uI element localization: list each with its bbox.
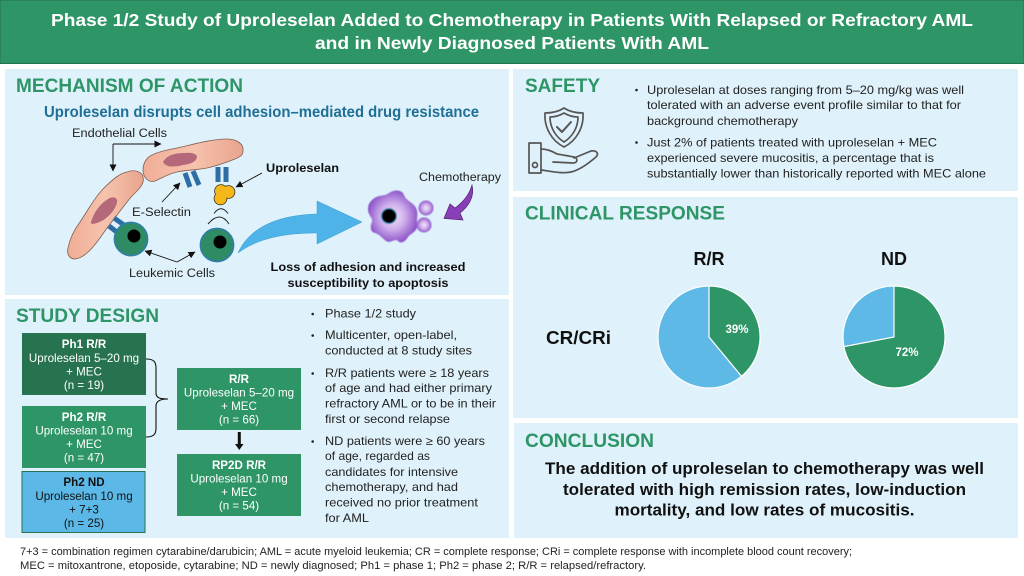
- box: Ph2 R/R: + MEC: [66, 438, 102, 451]
- heading: study design: STUDY DESIGN: [16, 306, 159, 327]
- heading: mechanism of action: MECHANISM OF ACTION: [16, 76, 243, 97]
- label: e-selectin: [132, 183, 191, 219]
- text block: study bullets: ND patients were ≥ 60 years: [325, 435, 485, 448]
- box: Ph1 R/R: + MEC: [66, 366, 102, 378]
- illustration: e-selectin receptors: [109, 167, 226, 233]
- subheading: Uproleselan disrupts cell adhesion–mediated drug resistance: [44, 104, 479, 121]
- text block: study bullets: received no prior treatment: [325, 496, 479, 510]
- icon: shield and hand: [529, 108, 597, 173]
- heading: safety: SAFETY: [525, 76, 600, 97]
- illustration: uproleselan molecule: [208, 185, 234, 224]
- label: e-selectin: E-Selectin: [132, 207, 191, 219]
- row label: CR/CRi: CR/CRi: [546, 328, 611, 348]
- text block: safety bullets: substantially lower than historically reported with MEC alone: [647, 166, 986, 180]
- box: Ph2 R/R: [22, 406, 146, 468]
- box: Ph1 R/R: [22, 333, 146, 395]
- title banner: and in Newly Diagnosed Patients With AML: [315, 33, 709, 53]
- column label: ND: ND: [881, 249, 907, 269]
- text block: conclusion: mortality, and low rates of mucositis.: [614, 502, 914, 520]
- bracket: [146, 359, 168, 437]
- box: R/R combined: [177, 368, 301, 430]
- title banner: Phase 1/2 Study of Uproleselan Added to Chemotherapy in Patients With Relapsed or Refractory AML: [51, 10, 973, 30]
- label: endothelial cells: Endothelial Cells: [72, 128, 167, 140]
- caption: loss of adhesion: Loss of adhesion and increased: [270, 260, 466, 274]
- panel: conclusion: [514, 423, 1018, 538]
- footnote: [20, 546, 852, 572]
- heading: conclusion: CONCLUSION: [525, 431, 654, 452]
- box: RP2D R/R: + MEC: [221, 486, 257, 499]
- arrow: chemotherapy: [444, 185, 473, 220]
- illustration: endothelial cells: [68, 139, 243, 259]
- box: R/R combined: R/R: [229, 373, 250, 386]
- box: RP2D R/R: [177, 454, 301, 516]
- arrow: R/R to RP2D: [235, 432, 244, 450]
- caption: loss of adhesion: susceptibility to apoptosis: [288, 276, 449, 290]
- text block: study bullets: of age, regarded as: [325, 450, 430, 463]
- panel: safety: [513, 69, 1018, 191]
- box: Ph1 R/R: (n = 19): [64, 379, 104, 392]
- text block: safety bullets: Just 2% of patients treated with uproleselan + MEC: [647, 136, 937, 150]
- caption: loss of adhesion: [270, 260, 466, 290]
- box: Ph2 R/R: (n = 47): [64, 452, 104, 464]
- box: Ph2 ND: [22, 472, 145, 532]
- box: RP2D R/R: (n = 54): [219, 500, 259, 512]
- box: R/R combined: Uproleselan 5–20 mg: [184, 386, 294, 400]
- text block: conclusion: The addition of uproleselan to chemotherapy was well: [545, 460, 984, 478]
- box: Ph2 R/R: Uproleselan 10 mg: [35, 424, 133, 438]
- text block: safety bullets: tolerated with an adverse event profile similar to that for: [647, 98, 961, 112]
- illustration: apoptotic cell: [368, 191, 434, 242]
- pie chart: R/R 39%: 39%: [725, 324, 749, 336]
- arrow: loss of adhesion: [238, 201, 362, 253]
- box: Ph2 ND: Ph2 ND: [63, 476, 105, 489]
- box: Ph2 ND: Uproleselan 10 mg: [35, 490, 133, 503]
- text block: safety bullets: background chemotherapy: [647, 114, 798, 128]
- pie chart: ND 72%: 72%: [895, 347, 919, 359]
- text block: study bullets: first or second relapse: [325, 413, 450, 426]
- box: Ph2 ND: (n = 25): [64, 517, 104, 530]
- footnote: MEC = mitoxantrone, etoposide, cytarabine; ND = newly diagnosed; Ph1 = phase 1; Ph2 = phase 2; R/R = relapsed/refractory.: [20, 560, 646, 572]
- text block: conclusion: [545, 460, 984, 520]
- label: leukemic cells: [129, 251, 215, 280]
- text block: study bullets: Phase 1/2 study: [325, 308, 416, 320]
- label: chemotherapy: Chemotherapy: [419, 172, 501, 184]
- box: Ph2 R/R: Ph2 R/R: [62, 411, 107, 424]
- text block: safety bullets: Uproleselan at doses ranging from 5–20 mg/kg was well: [647, 83, 964, 97]
- panel: mechanism of action: [5, 69, 509, 295]
- text block: study bullets: chemotherapy, and had: [325, 481, 458, 494]
- text block: study bullets: Multicenter, open-label,: [325, 329, 457, 342]
- pie chart: ND 72%: [843, 286, 945, 388]
- box: Ph1 R/R: Ph1 R/R: [62, 338, 107, 351]
- label: endothelial cells: [72, 128, 167, 171]
- panel: study design: [5, 299, 509, 538]
- panel: clinical response: [513, 197, 1018, 418]
- footnote: 7+3 = combination regimen cytarabine/darubicin; AML = acute myeloid leukemia; CR = complete response; CRi = complete response with incomplete blood count recovery;: [20, 546, 852, 558]
- text block: conclusion: tolerated with high remission rates, low-induction: [563, 481, 966, 499]
- box: R/R combined: (n = 66): [219, 414, 259, 426]
- heading: clinical response: CLINICAL RESPONSE: [525, 204, 725, 224]
- text block: safety bullets: experienced severe mucositis, a percentage that is: [647, 151, 934, 165]
- text block: study bullets: conducted at 8 study sites: [325, 344, 472, 358]
- box: RP2D R/R: Uproleselan 10 mg: [190, 472, 288, 486]
- text block: study bullets: refractory AML or to be in their: [325, 398, 496, 410]
- text block: study bullets: R/R patients were ≥ 18 years: [325, 367, 489, 380]
- text block: study bullets: [311, 308, 496, 525]
- box: Ph2 ND: + 7+3: [69, 504, 99, 516]
- box: R/R combined: + MEC: [221, 400, 257, 413]
- text block: study bullets: for AML: [325, 512, 370, 525]
- column label: R/R: R/R: [694, 249, 724, 269]
- text block: study bullets: of age and had either primary: [325, 382, 492, 395]
- label: uproleselan: [236, 161, 339, 187]
- box: Ph1 R/R: Uproleselan 5–20 mg: [29, 352, 139, 365]
- label: uproleselan: Uproleselan: [266, 161, 339, 175]
- text block: study bullets: candidates for intensive: [325, 466, 458, 479]
- text block: safety bullets: [635, 83, 986, 180]
- box: RP2D R/R: RP2D R/R: [212, 459, 267, 472]
- title banner: [0, 0, 1024, 64]
- label: leukemic cells: Leukemic Cells: [129, 268, 215, 280]
- illustration: leukemic cells: [114, 222, 234, 262]
- pie chart: R/R 39%: [658, 286, 760, 388]
